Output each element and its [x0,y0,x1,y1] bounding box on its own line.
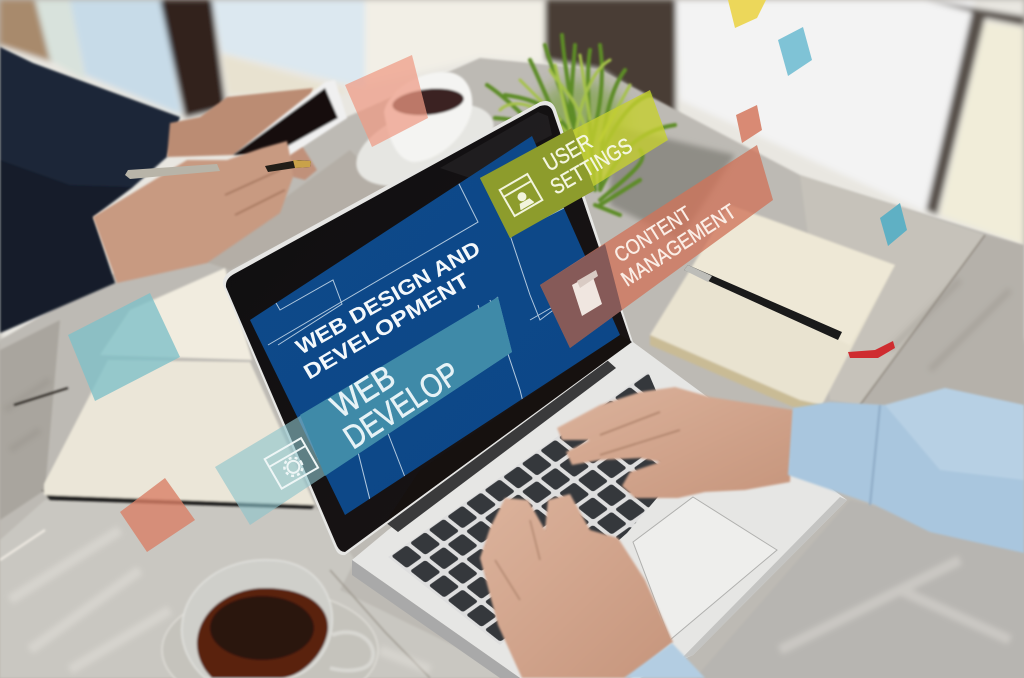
label: user settings: USER [539,129,597,176]
left upper hand [167,88,313,157]
plant [487,35,675,215]
label: web develop: WEB [324,358,401,425]
decorative square: salmon bottom [120,478,195,552]
desk wood streaks [5,280,1020,670]
bottom hand typing [480,494,673,678]
black pen on right notebook [684,265,842,340]
laptop lid and bezel [223,101,633,555]
icon: gear window [265,438,318,489]
decorative square: teal left [68,293,180,401]
heading: web design and development: WEB DESIGN AND [292,237,484,359]
right hand typing [557,387,793,498]
glass table reflection behind plant [610,125,735,240]
right notebook [650,205,895,410]
decorative square: blue top [778,27,812,76]
panel: content management [540,145,773,348]
heading: web design and development: DEVELOPMENT [300,269,474,384]
label: content management: MANAGEMENT [617,200,741,291]
decorative square: blue right [880,203,907,246]
pen [125,160,311,179]
thumb behind phone [285,146,317,180]
left notebook [14,268,315,509]
laptop base [352,342,847,678]
panel: web develop [215,297,512,525]
phone [233,80,347,160]
glass tea cup [162,560,378,678]
right shirt sleeve [788,388,1024,553]
left person sleeve [0,47,180,333]
panel: user settings [480,90,668,238]
label: web develop: DEVELOP [337,354,466,456]
screen panel [250,136,620,515]
bottom shirt sleeve [624,643,705,678]
red bookmark [848,341,895,358]
keyboard [388,372,687,645]
coffee cup on saucer [345,72,505,203]
icon: folder [572,270,602,316]
touchpad [633,497,777,640]
decorative square: yellow [728,0,766,28]
label: content management: CONTENT [610,202,696,267]
reflection on screen [386,335,632,522]
screen wireframe lines [268,184,564,500]
heading: web design and development [292,237,484,384]
background: windows and frames [0,0,1024,340]
decorative square: salmon small [736,105,762,143]
label: user settings: SETTINGS [546,133,636,199]
icon: user settings window [500,174,542,216]
lower hand holding pen [93,141,293,283]
decorative square: salmon top [345,55,428,147]
hinge [385,360,616,532]
